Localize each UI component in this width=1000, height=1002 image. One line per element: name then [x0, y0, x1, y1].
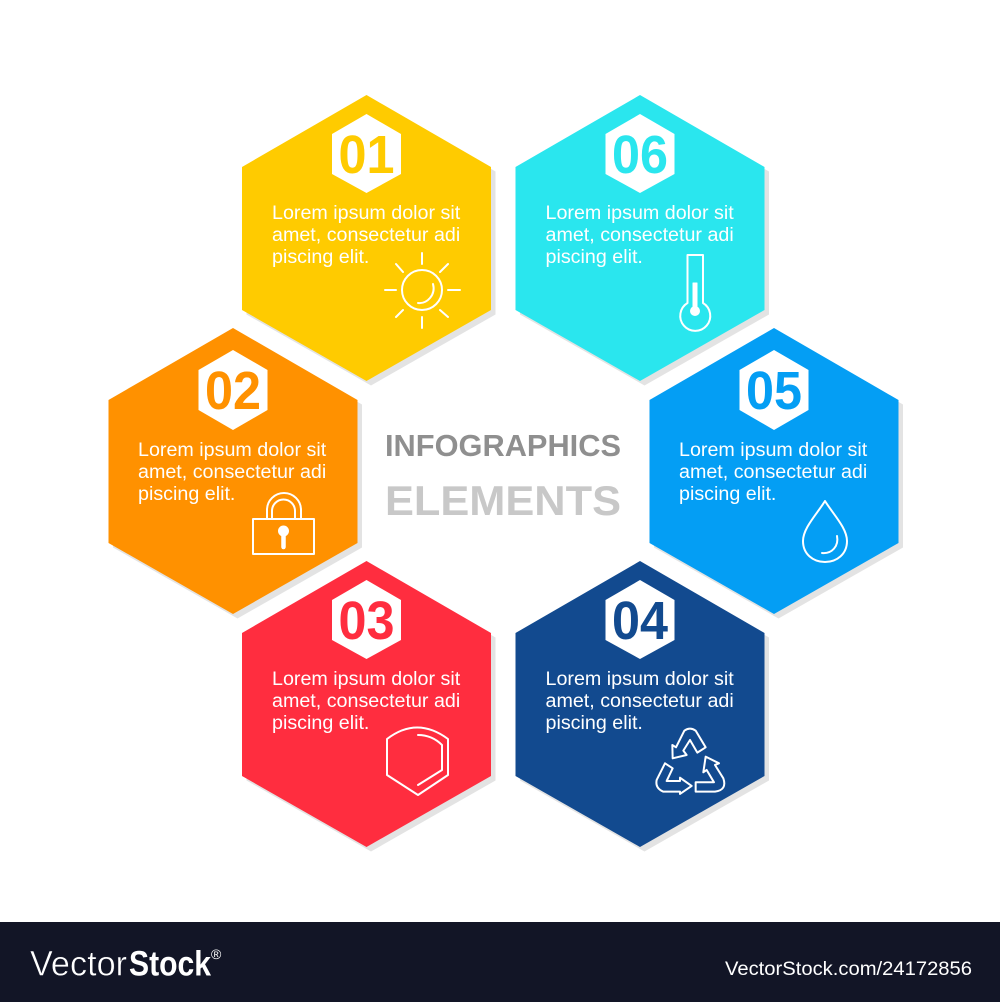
icon: recycle arrows	[656, 729, 724, 794]
panel: hexagon 05: amet, consectetur adi	[679, 461, 867, 483]
icon: padlock	[253, 493, 314, 554]
panel: hexagon 05: piscing elit.	[679, 483, 776, 505]
panel: hexagon 02: piscing elit.	[138, 483, 235, 505]
title: ELEMENTS	[385, 477, 621, 524]
icon: sun	[385, 253, 460, 328]
panel: hexagon 02: amet, consectetur adi	[138, 461, 326, 483]
number 01: 01	[338, 125, 394, 185]
text block 02: Lorem ipsum dolor sit	[138, 439, 327, 461]
footer logo: Vector	[30, 944, 127, 984]
panel: hexagon 01: amet, consectetur adi	[272, 224, 460, 246]
icon: thermometer	[680, 255, 710, 331]
number 03: 03	[338, 591, 394, 651]
text block 03: Lorem ipsum dolor sit	[272, 668, 461, 690]
text block 06: Lorem ipsum dolor sit	[546, 202, 734, 224]
panel: hexagon 03: piscing elit.	[272, 712, 369, 734]
panel: hexagon 05	[650, 328, 903, 618]
panel: hexagon 04	[516, 561, 769, 852]
panel: hexagon 06	[516, 95, 769, 386]
number 05: 05	[746, 361, 802, 421]
icon: water drop	[803, 501, 847, 562]
panel: hexagon 01	[242, 95, 496, 386]
number 06: 06	[612, 125, 668, 185]
footer logo: Stock	[129, 944, 211, 984]
text block 05: Lorem ipsum dolor sit	[679, 439, 868, 461]
number 04: 04	[612, 591, 668, 651]
text block 01: Lorem ipsum dolor sit	[272, 202, 461, 224]
panel: hexagon 06: piscing elit.	[546, 246, 643, 268]
panel: hexagon 03: amet, consectetur adi	[272, 690, 460, 712]
panel: hexagon 04: piscing elit.	[546, 712, 643, 734]
panel: hexagon 02	[108, 328, 362, 618]
title: INFOGRAPHICS	[385, 428, 621, 463]
panel: hexagon 04: amet, consectetur adi	[546, 690, 734, 712]
footer image id: VectorStock.com/24172856	[725, 959, 972, 980]
footer bar	[0, 922, 1000, 1002]
number 02: 02	[205, 361, 261, 421]
panel: hexagon 01: piscing elit.	[272, 246, 369, 268]
text block 04: Lorem ipsum dolor sit	[546, 668, 734, 690]
footer logo: ®	[211, 946, 222, 962]
panel: hexagon 03	[242, 561, 496, 852]
icon: shield	[387, 728, 448, 795]
panel: hexagon 06: amet, consectetur adi	[546, 224, 734, 246]
title	[385, 428, 621, 524]
footer logo	[30, 944, 222, 984]
